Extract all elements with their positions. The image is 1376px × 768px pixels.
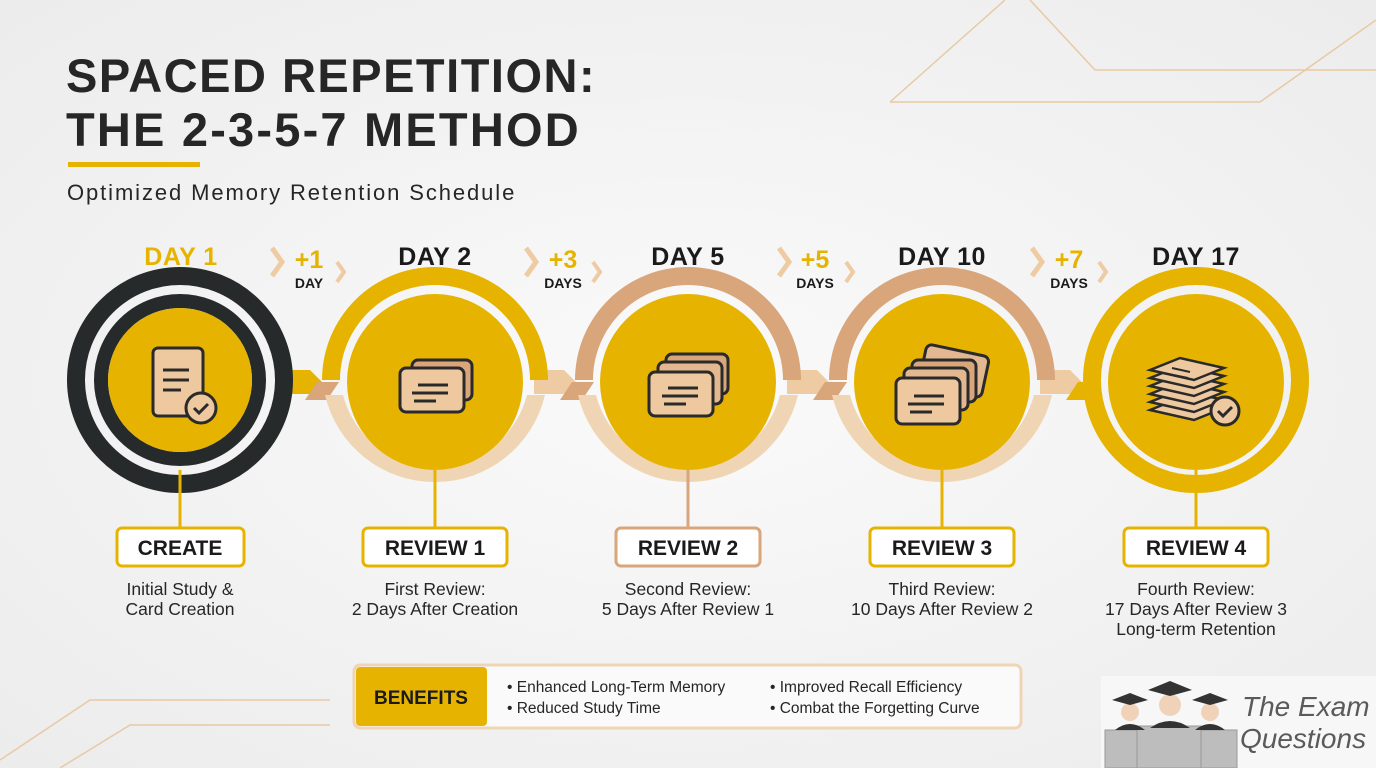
step 4 circle: [829, 267, 1055, 482]
subtitle: Optimized Memory Retention Schedule: [67, 180, 516, 205]
stage boxes: REVIEW 1: [385, 537, 485, 560]
stage descriptions: [126, 579, 1287, 639]
title underline: [68, 162, 200, 167]
stage descriptions: Long-term Retention: [1116, 619, 1276, 639]
title: THE 2-3-5-7 METHOD: [66, 103, 581, 156]
day labels: DAY 17: [1152, 243, 1240, 271]
interval labels: +7: [1055, 246, 1083, 274]
stage descriptions: 10 Days After Review 2: [851, 599, 1033, 619]
stage descriptions: Fourth Review:: [1137, 579, 1255, 599]
interval labels: DAYS: [796, 275, 834, 291]
day labels: DAY 5: [651, 243, 725, 271]
connector lines: [180, 470, 1196, 528]
interval labels: +1: [295, 246, 323, 274]
benefits panel: [354, 665, 1021, 728]
step 5 circle: [1092, 276, 1300, 484]
stage descriptions: Third Review:: [889, 579, 995, 599]
logo: The Exam: [1242, 691, 1370, 722]
day labels: DAY 1: [144, 243, 218, 271]
benefits panel: • Reduced Study Time: [507, 700, 661, 717]
stage boxes: REVIEW 3: [892, 537, 992, 560]
title: SPACED REPETITION:: [66, 49, 596, 102]
day labels: [144, 243, 1240, 271]
logo: [1101, 676, 1376, 768]
stage descriptions: Second Review:: [625, 579, 751, 599]
interval labels: DAYS: [544, 275, 582, 291]
stage descriptions: Card Creation: [126, 599, 234, 619]
interval labels: DAY: [295, 275, 324, 291]
interval labels: +5: [801, 246, 829, 274]
benefits panel: • Enhanced Long-Term Memory: [507, 679, 725, 696]
step 3 circle: [575, 267, 801, 482]
interval labels: [272, 246, 1106, 291]
benefits panel: BENEFITS: [374, 688, 468, 709]
stage boxes: REVIEW 4: [1146, 537, 1246, 560]
day labels: DAY 10: [898, 243, 986, 271]
benefits panel: • Improved Recall Efficiency: [770, 679, 962, 696]
stage descriptions: Initial Study &: [126, 579, 234, 599]
stage boxes: REVIEW 2: [638, 537, 738, 560]
title: [66, 49, 596, 156]
stage descriptions: 2 Days After Creation: [352, 599, 518, 619]
step 1 circle: [76, 276, 284, 484]
logo: Questions: [1240, 723, 1366, 754]
step 2 circle: [322, 267, 548, 482]
connector arrows: [280, 370, 1100, 400]
stage descriptions: First Review:: [384, 579, 486, 599]
interval labels: +3: [549, 246, 577, 274]
interval labels: DAYS: [1050, 275, 1088, 291]
stage boxes: CREATE: [138, 537, 222, 560]
stage descriptions: 17 Days After Review 3: [1105, 599, 1287, 619]
benefits panel: • Combat the Forgetting Curve: [770, 700, 980, 717]
stage boxes: [117, 528, 1268, 566]
day labels: DAY 2: [398, 243, 472, 271]
stage descriptions: 5 Days After Review 1: [602, 599, 774, 619]
